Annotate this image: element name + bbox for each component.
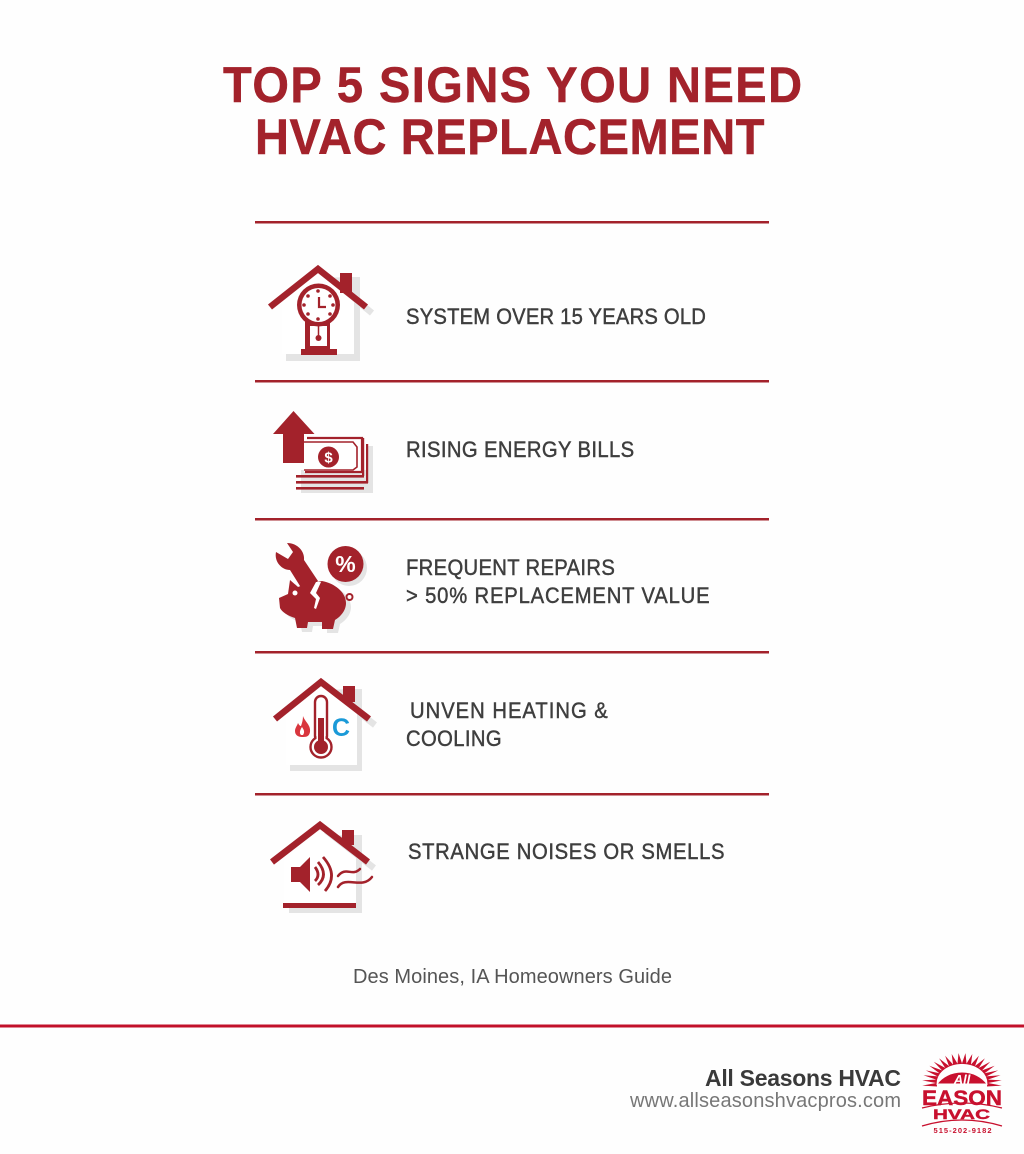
icon: dome [937, 1072, 987, 1084]
footer company name [629, 1065, 901, 1112]
title: TOP 5 SIGNS YOU NEED [223, 58, 802, 113]
text: energy bills: RISING ENERGY BILLS [406, 438, 634, 462]
text: uneven heating [406, 699, 608, 751]
text: system age: SYSTEM OVER 15 YEARS OLD [406, 305, 706, 329]
logo: HVAC [933, 1106, 990, 1122]
row 4: uneven heating [275, 682, 608, 771]
footer company name: All Seasons HVAC [705, 1065, 901, 1091]
logo [922, 1053, 1002, 1135]
row 2: energy bills [273, 411, 634, 493]
icon: arrow and money [273, 411, 373, 493]
icon: house with clock [270, 269, 372, 361]
icon: sun rays [922, 1053, 1002, 1087]
text: frequent repairs [406, 556, 710, 608]
logo: 515-202-9182 [934, 1126, 992, 1135]
icon: wrench and piggy bank: % [335, 551, 356, 577]
icon: wrench and piggy bank [276, 543, 367, 633]
text: uneven heating: COOLING [406, 727, 502, 751]
row 3: frequent repairs [276, 543, 710, 633]
title: HVAC REPLACEMENT [255, 110, 765, 165]
icon: arrow and money: $ [324, 450, 333, 466]
icon: house with thermometer [275, 682, 375, 771]
logo: All [953, 1072, 971, 1087]
row 1: system age [270, 269, 706, 361]
text: frequent repairs: FREQUENT REPAIRS [406, 556, 615, 580]
footer company name: www.allseasonshvacpros.com [629, 1090, 901, 1112]
row 5: strange noises [272, 825, 724, 913]
text: uneven heating: UNVEN HEATING & [410, 699, 608, 723]
logo: EASON [922, 1086, 1002, 1110]
text: frequent repairs: > 50% REPLACEMENT VALUE [406, 584, 710, 608]
text: strange noises: STRANGE NOISES OR SMELLS [408, 840, 724, 864]
subtitle: Des Moines, IA Homeowners Guide [353, 966, 672, 988]
title [223, 58, 802, 165]
icon: house with speaker [272, 825, 374, 913]
icon: house with thermometer: C [332, 714, 350, 742]
